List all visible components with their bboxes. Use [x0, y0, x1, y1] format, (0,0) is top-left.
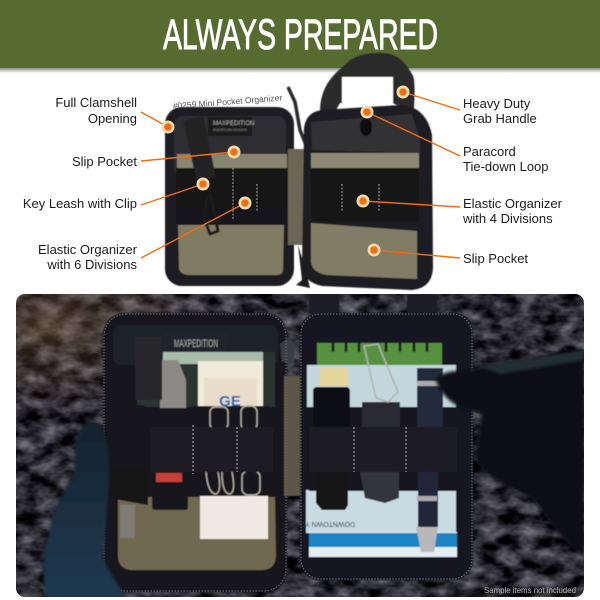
right callout labels: Paracord — [463, 144, 516, 159]
spine — [284, 376, 300, 496]
carabiner — [364, 344, 398, 402]
zipper edges — [104, 314, 472, 591]
white box: GE — [219, 393, 241, 410]
lifestyle photo panel — [16, 294, 584, 600]
callout dots — [162, 86, 410, 256]
left callout labels: Slip Pocket — [72, 154, 137, 169]
key leash clip — [204, 196, 218, 234]
notepad — [317, 343, 442, 366]
sample items note: Sample items not included — [484, 585, 576, 595]
pocket tool — [360, 402, 400, 503]
model number caption: #0259 Mini Pocket Organizer — [172, 92, 283, 111]
callout leader lines — [141, 92, 460, 258]
white block — [200, 496, 268, 539]
right panel of pouch — [302, 105, 433, 290]
right callout labels: Heavy Duty — [463, 96, 531, 111]
right callout labels: Tie-down Loop — [463, 159, 549, 174]
pen — [416, 368, 443, 552]
left callout labels: with 6 Divisions — [46, 257, 137, 272]
mulch background — [16, 294, 584, 597]
right compartment — [284, 313, 473, 580]
flashlight — [313, 387, 350, 510]
pocket backing — [193, 405, 270, 408]
zipper pull — [280, 338, 295, 362]
left callout labels: Opening — [88, 111, 137, 126]
elastic band — [316, 426, 348, 427]
left panel of pouch — [165, 107, 294, 286]
grab handle — [320, 53, 415, 112]
maxpedition label — [208, 117, 254, 136]
header banner — [0, 0, 600, 73]
left callout labels: Key Leash with Clip — [23, 196, 137, 211]
multi-tool — [160, 360, 186, 408]
key — [120, 505, 135, 538]
map upper — [307, 365, 456, 407]
usb drive — [152, 472, 188, 510]
right callout labels: Grab Handle — [463, 111, 537, 126]
maxpedition label: AMERICAN DESIGN — [213, 128, 247, 132]
elastic band — [210, 426, 259, 473]
left callout labels: Full Clamshell — [55, 95, 137, 110]
paper clips and safety pins — [206, 406, 260, 495]
right compartment: DOWNTOWN YONGE — [284, 520, 355, 527]
spine — [288, 149, 308, 245]
product photo: open organizer — [165, 53, 433, 290]
paracord pull — [288, 87, 306, 145]
left compartment — [103, 313, 287, 592]
maxpedition label: MAXPEDITION — [213, 121, 254, 127]
stitch lines on elastic — [233, 168, 379, 220]
right callout labels: with 4 Divisions — [462, 211, 553, 226]
right callout labels: Slip Pocket — [463, 251, 528, 266]
left callout labels — [23, 95, 138, 272]
zipper pull bottom — [296, 245, 310, 288]
maxpedition patch: MAXPEDITION — [174, 338, 218, 350]
right hand in glove — [436, 350, 584, 556]
maxpedition patch — [174, 338, 218, 348]
swivel clip and fob — [117, 338, 162, 506]
map lower — [306, 490, 456, 533]
right callout labels — [462, 96, 563, 266]
stitching on bands — [193, 425, 406, 474]
title: ALWAYS PREPARED — [163, 11, 438, 59]
left callout labels: Elastic Organizer — [38, 242, 138, 257]
glove highlight — [480, 350, 584, 374]
right callout labels: Elastic Organizer — [463, 196, 563, 211]
straps above right compartment — [309, 294, 339, 314]
left hand in glove — [44, 422, 130, 600]
white box — [198, 361, 263, 410]
